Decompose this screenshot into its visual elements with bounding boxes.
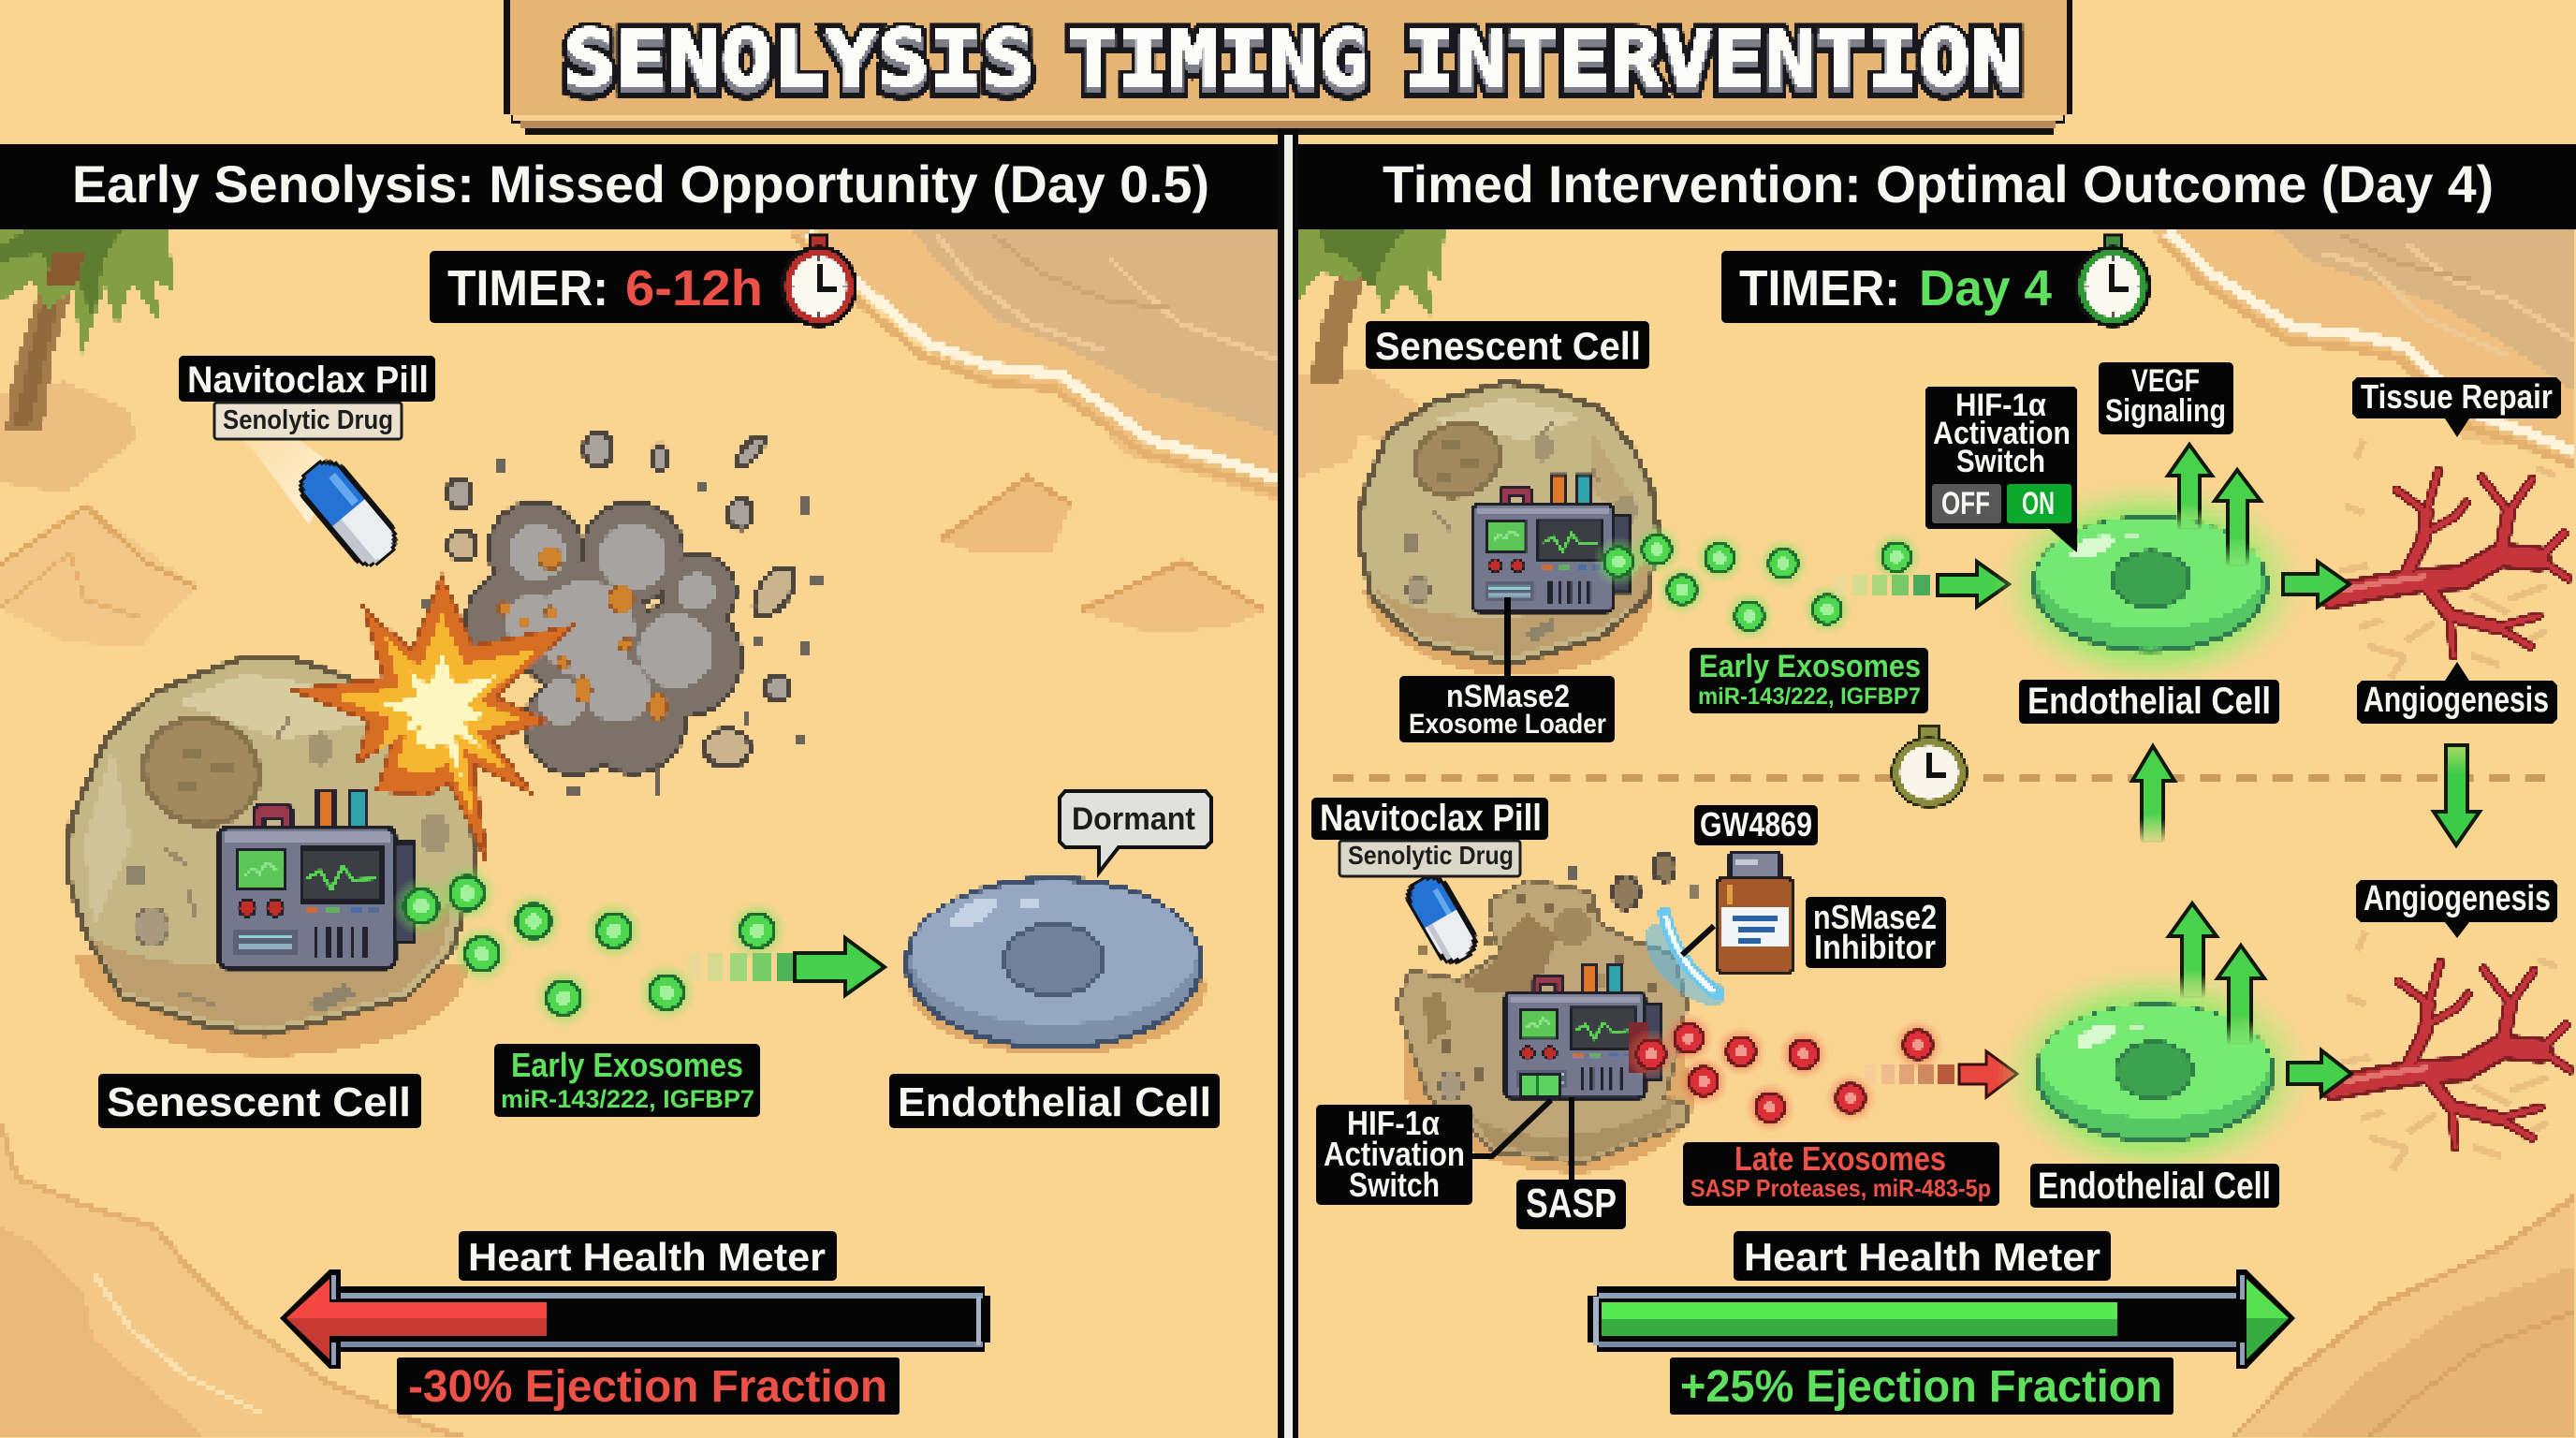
label: Navitoclax Pill left bbox=[179, 356, 435, 439]
title text: TIMING bbox=[1068, 22, 1368, 112]
label: Endothelial Cell left: Endothelial Cell bbox=[898, 1079, 1211, 1125]
right panel header: Timed Intervention: Optimal Outcome (Day 4) bbox=[1383, 154, 2494, 213]
arrow: exosomes to endothelial cell left bbox=[688, 938, 885, 995]
right panel beach scenery bbox=[1298, 229, 2576, 1438]
title text: INTERVENTION bbox=[1404, 22, 2022, 112]
label: Tissue Repair: Tissue Repair bbox=[2361, 377, 2553, 416]
label: VEGF Signaling bbox=[2099, 362, 2233, 434]
heart health meter left bbox=[280, 1269, 990, 1369]
label: Late Exosomes: Late Exosomes bbox=[1734, 1139, 1946, 1178]
early exosomes right bbox=[1593, 524, 1922, 641]
title text: INTERVENTION bbox=[1404, 14, 2022, 105]
arrows: VEGF upward top bbox=[2168, 445, 2261, 566]
connector: machine to nSMase2 label bbox=[1504, 597, 1511, 678]
pill right bbox=[1398, 868, 1485, 971]
arrow: down between rows bbox=[2434, 745, 2480, 845]
label: HIF-1α Activation Switch bottom: Activation bbox=[1324, 1135, 1465, 1173]
label: Early Exosomes right: miR-143/222, IGFBP7 bbox=[1698, 683, 1921, 710]
title text: TIMING bbox=[1068, 20, 1368, 110]
senescent cell right top bbox=[1358, 382, 1658, 676]
label: HIF-1α Activation Switch bottom: Switch bbox=[1349, 1166, 1440, 1204]
HIF-1α activation switch panel: OFF bbox=[1941, 486, 1990, 521]
title text: SENOLYSIS bbox=[564, 13, 1034, 104]
label: Early Exosomes left: miR-143/222, IGFBP7 bbox=[501, 1085, 754, 1113]
connector: bottle to stream bbox=[1682, 926, 1714, 955]
label: nSMase2 Inhibitor bbox=[1806, 897, 1946, 968]
nSMase2 inhibitor stream bbox=[1657, 913, 1718, 994]
cracked senescent cell bbox=[1397, 855, 1700, 1173]
label: Endothelial Cell right top: Endothelial Cell bbox=[2027, 681, 2271, 722]
machine right bottom with HIF switch bbox=[1505, 964, 1661, 1098]
label: -30% Ejection Fraction: -30% Ejection Fraction bbox=[408, 1362, 887, 1412]
explosion bbox=[292, 433, 824, 863]
arrow: endothelial to vessel bottom bbox=[2288, 1050, 2351, 1096]
nSMase2 machine left bbox=[219, 790, 415, 968]
title text: SENOLYSIS bbox=[564, 14, 1034, 105]
arrows: upward bottom bbox=[2169, 903, 2264, 1045]
label: +25% Ejection Fraction: +25% Ejection Fraction bbox=[1680, 1362, 2162, 1412]
HIF-1α activation switch panel: Switch bbox=[1956, 444, 2045, 479]
label: Endothelial Cell right bottom: Endothelial Cell bbox=[2038, 1166, 2271, 1207]
title text: TIMING bbox=[1068, 13, 1368, 104]
label: Angiogenesis top bbox=[2357, 662, 2557, 724]
title text: SENOLYSIS bbox=[564, 22, 1034, 112]
blood vessel top bbox=[2331, 440, 2569, 678]
label: Heart Health Meter left: Heart Health Meter bbox=[468, 1235, 826, 1279]
label: Senescent Cell right: Senescent Cell bbox=[1375, 324, 1641, 368]
timer right: TIMER: bbox=[1739, 260, 1900, 316]
timer right bbox=[1721, 236, 2151, 328]
center divider bbox=[1278, 128, 1298, 1438]
arrow: endothelial to vessel top bbox=[2283, 562, 2349, 607]
late exosomes bbox=[1626, 1013, 1943, 1133]
left panel header bbox=[0, 144, 1278, 229]
label: Navitoclax Pill right bbox=[1311, 798, 1548, 876]
title plaque bbox=[504, 0, 2072, 135]
label: Late Exosomes bbox=[1683, 1139, 1999, 1206]
label: Early Exosomes left bbox=[494, 1044, 760, 1117]
callout: Dormant: Dormant bbox=[1072, 801, 1195, 837]
nSMase2 machine right top bbox=[1472, 475, 1629, 612]
icon: small stopwatch timeline bbox=[1891, 726, 1968, 808]
right panel header bbox=[1298, 144, 2576, 229]
label: Navitoclax Pill right: Navitoclax Pill bbox=[1320, 798, 1542, 839]
HIF-1α activation switch panel: Activation bbox=[1933, 416, 2071, 451]
arrow: up between rows bbox=[2132, 746, 2174, 843]
title text: TIMING bbox=[1068, 14, 1368, 105]
timer left: TIMER: bbox=[447, 260, 608, 316]
title text bbox=[564, 13, 2022, 112]
label: HIF-1α Activation Switch bottom: HIF-1α bbox=[1347, 1104, 1440, 1142]
label: Angiogenesis bottom bbox=[2356, 879, 2557, 938]
timer left bbox=[430, 236, 857, 328]
title text: SENOLYSIS bbox=[564, 20, 1034, 110]
icon: green stopwatch bbox=[2074, 236, 2151, 328]
icon: inhibitor bottle bbox=[1717, 853, 1793, 974]
left pill trail bbox=[201, 403, 337, 524]
HIF-1α activation switch panel: HIF-1α bbox=[1955, 388, 2046, 423]
label: Early Exosomes right bbox=[1690, 648, 1928, 713]
callout: Dormant bbox=[1060, 791, 1211, 873]
timer left: 6-12h bbox=[625, 260, 763, 316]
label: nSMase2 Inhibitor: Inhibitor bbox=[1814, 928, 1936, 966]
title text: INTERVENTION bbox=[1404, 20, 2022, 110]
label: Tissue Repair bbox=[2352, 377, 2561, 437]
timeline dashed divider bbox=[1333, 774, 2545, 782]
timer right: Day 4 bbox=[1919, 260, 2052, 316]
icon: red stopwatch bbox=[781, 236, 857, 328]
arrow: exosomes to endothelial cell right top bbox=[1835, 562, 2009, 607]
label: Early Exosomes left: Early Exosomes bbox=[511, 1046, 743, 1084]
endothelial cell active bottom bbox=[1996, 966, 2314, 1180]
endothelial cell active top bbox=[1993, 479, 2307, 689]
blood vessel bottom bbox=[2333, 932, 2570, 1169]
heart health meter right bbox=[1588, 1269, 2295, 1369]
label: Navitoclax Pill left: Senolytic Drug bbox=[223, 405, 393, 435]
senescent cell left bbox=[66, 656, 475, 1056]
label: Senescent Cell left: Senescent Cell bbox=[107, 1079, 411, 1125]
label: Navitoclax Pill left: Navitoclax Pill bbox=[187, 360, 429, 401]
HIF-1α activation switch panel bbox=[1925, 387, 2077, 552]
connector: switch to HIF label bbox=[1470, 1100, 1551, 1156]
HIF-1α activation switch panel: ON bbox=[2022, 486, 2055, 521]
connector: machine to SASP bbox=[1569, 1097, 1574, 1181]
label: nSMase2 Exosome Loader bbox=[1399, 676, 1615, 742]
label: nSMase2 Exosome Loader: nSMase2 bbox=[1446, 679, 1570, 714]
title text: INTERVENTION bbox=[1404, 13, 2022, 104]
endothelial cell dormant bbox=[907, 879, 1206, 1055]
label: Early Exosomes right: Early Exosomes bbox=[1699, 649, 1921, 684]
left panel beach scenery bbox=[0, 229, 1280, 1438]
label: nSMase2 Exosome Loader: Exosome Loader bbox=[1409, 709, 1606, 740]
label: VEGF Signaling: Signaling bbox=[2105, 393, 2226, 429]
icon: navitoclax pill left bbox=[289, 450, 407, 576]
early exosomes left bbox=[391, 863, 787, 1028]
label: HIF-1α Activation Switch bottom bbox=[1316, 1104, 1472, 1205]
arrow: late exosomes to endothelial cell bbox=[1865, 1051, 2017, 1097]
label: Navitoclax Pill right: Senolytic Drug bbox=[1348, 841, 1514, 870]
label: GW4869: GW4869 bbox=[1700, 805, 1812, 844]
label: Late Exosomes: SASP Proteases, miR-483-5p bbox=[1690, 1174, 1991, 1202]
left panel header: Early Senolysis: Missed Opportunity (Day 0.5) bbox=[72, 154, 1209, 213]
label: SASP: SASP bbox=[1526, 1181, 1617, 1226]
label: VEGF Signaling: VEGF bbox=[2131, 363, 2200, 399]
label: Heart Health Meter right: Heart Health Meter bbox=[1744, 1235, 2100, 1279]
label: nSMase2 Inhibitor: nSMase2 bbox=[1813, 898, 1937, 936]
